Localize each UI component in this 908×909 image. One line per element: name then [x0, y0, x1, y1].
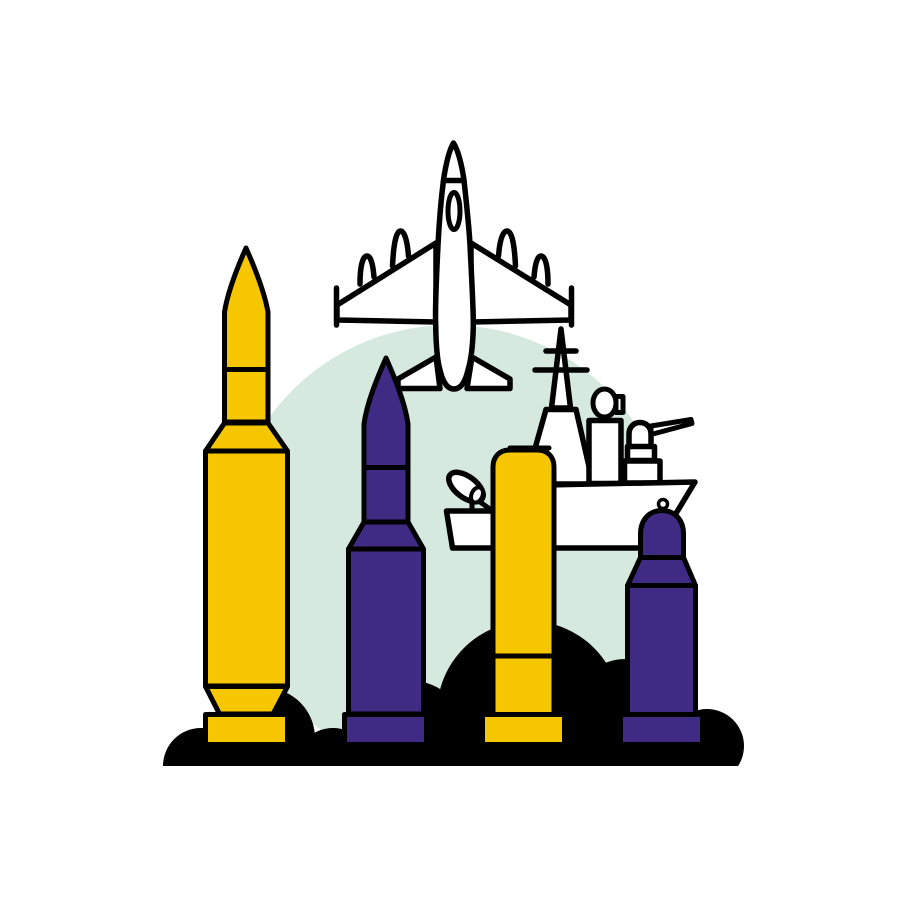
- base: [344, 714, 426, 744]
- tail fins: [398, 357, 510, 388]
- wings: [337, 243, 571, 322]
- dome: [640, 510, 684, 558]
- wing pylons: [360, 231, 548, 284]
- mast: [535, 329, 587, 408]
- illustration: weapons arsenal: [163, 140, 744, 766]
- missile 3: yellow blunt: [482, 448, 564, 744]
- superstructure: [525, 410, 593, 484]
- gun dome: [629, 422, 651, 447]
- gun mount: [628, 446, 654, 460]
- background circle: [270, 326, 638, 730]
- stage line: [224, 367, 268, 372]
- black ground hills: [163, 625, 744, 766]
- cockpit line: [444, 178, 464, 183]
- stage line: [364, 465, 408, 470]
- shoulder: [628, 558, 696, 586]
- missile 4: purple dome: [620, 500, 702, 744]
- stage line: [493, 654, 554, 658]
- gun barrel: [651, 420, 692, 434]
- tower block: [589, 420, 621, 484]
- shoulder: [348, 522, 424, 549]
- fuselage: [435, 143, 473, 389]
- wing tips: [336, 288, 572, 325]
- body: [628, 586, 696, 714]
- nose and upper stage: [224, 248, 268, 422]
- body: [493, 450, 554, 714]
- nose and upper stage: [364, 358, 408, 522]
- top cap line: [510, 446, 549, 450]
- fighter jet: [336, 143, 572, 389]
- body: [348, 549, 424, 714]
- shoulder: [206, 423, 288, 451]
- base: [206, 714, 288, 744]
- cockpit canopy: [448, 192, 460, 230]
- missile 1: tall yellow: [206, 248, 288, 744]
- base: [620, 714, 702, 744]
- top knob: [658, 500, 668, 508]
- body: [206, 451, 288, 686]
- satellite dish: [444, 467, 490, 510]
- base: [482, 714, 564, 744]
- gun base: [624, 461, 660, 483]
- missile 2: purple: [344, 358, 426, 744]
- radar dome: [593, 389, 623, 417]
- tail taper: [206, 686, 288, 714]
- hull: [446, 482, 695, 548]
- warship: [444, 329, 695, 548]
